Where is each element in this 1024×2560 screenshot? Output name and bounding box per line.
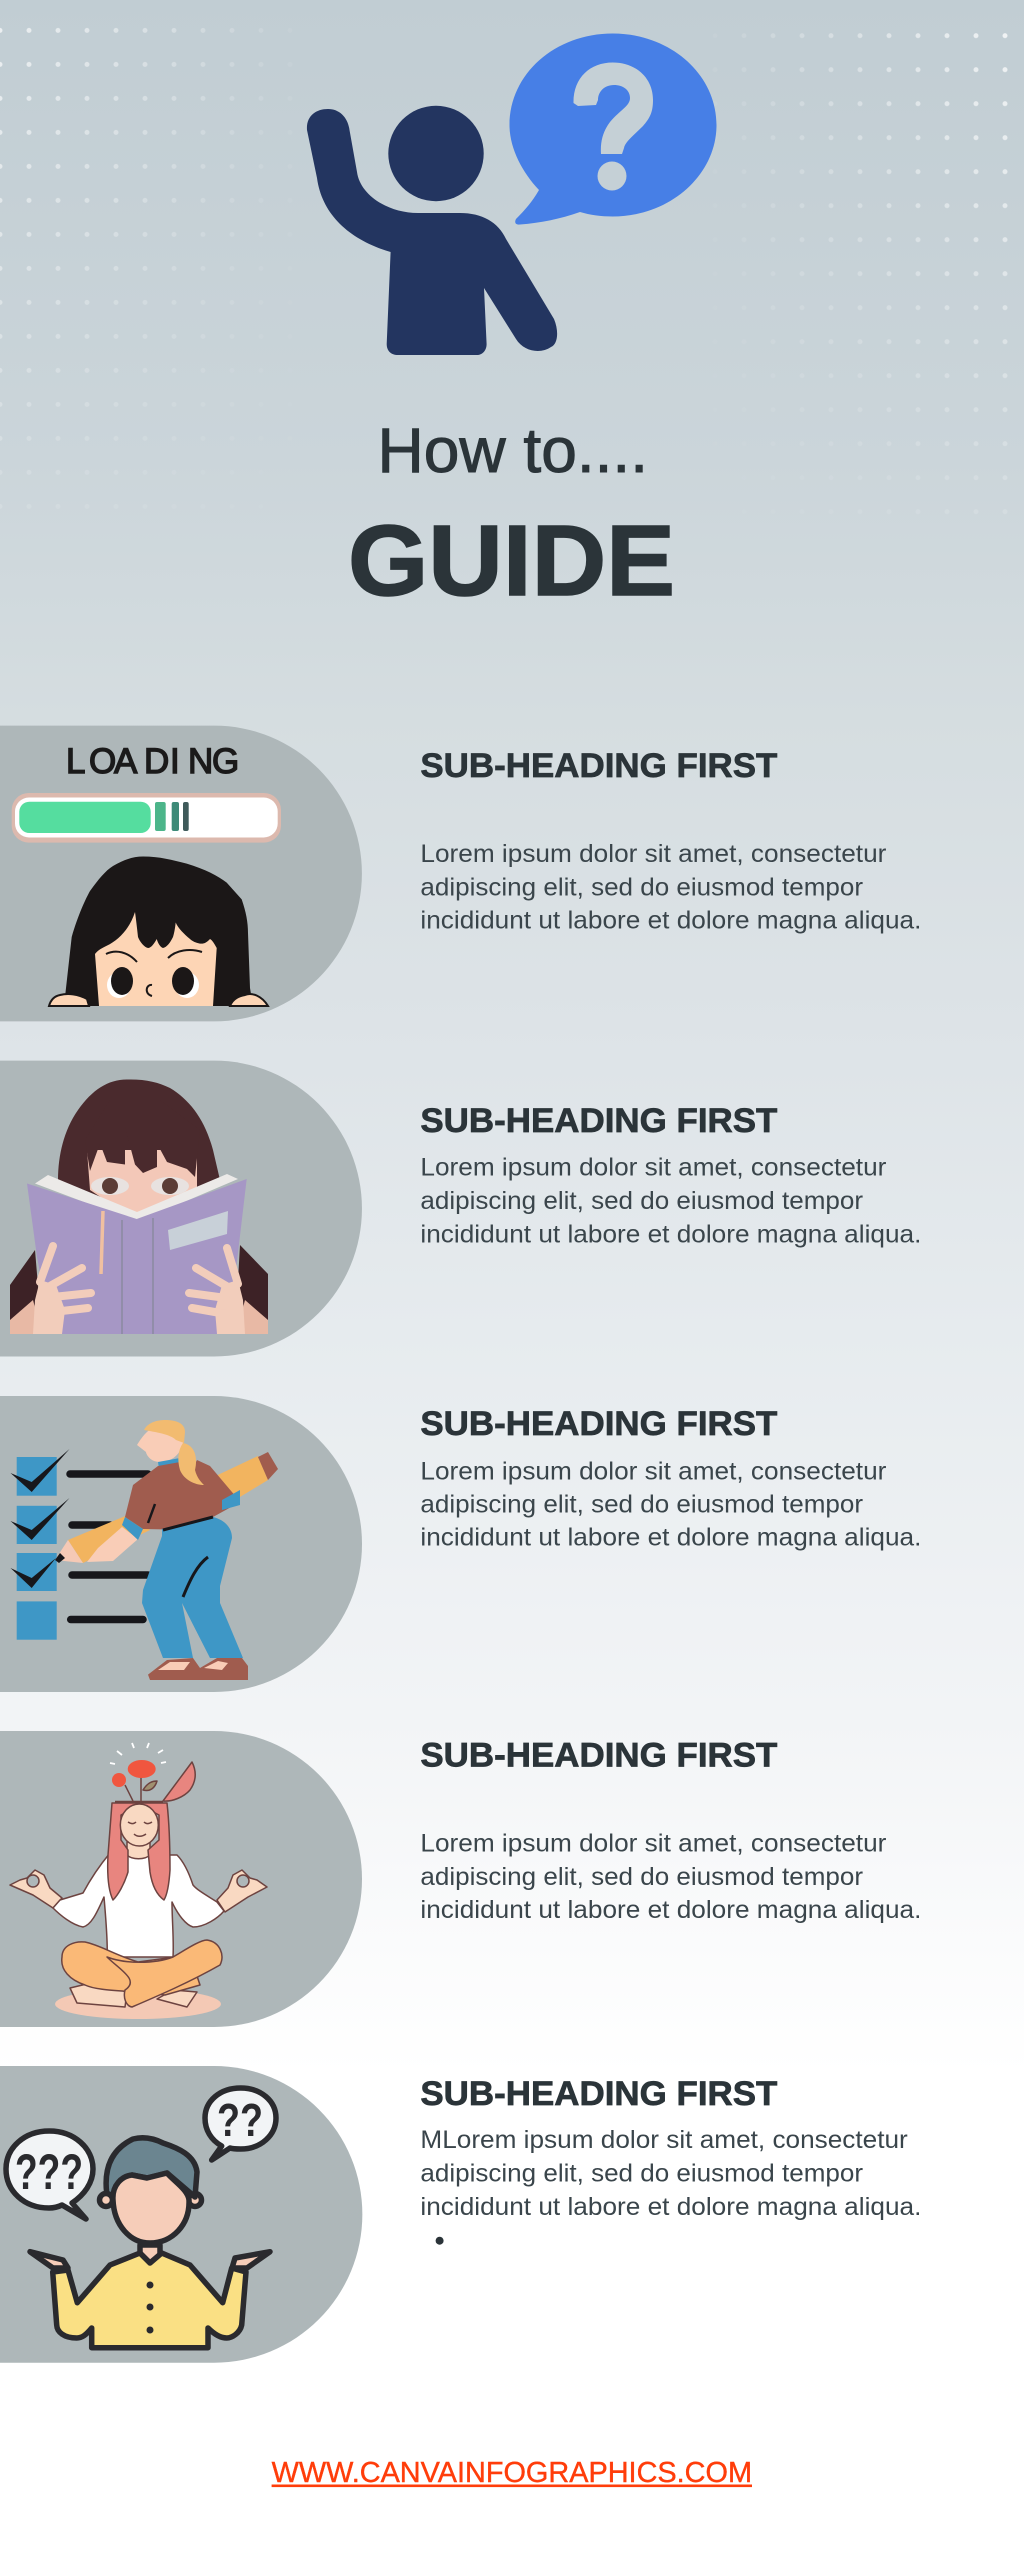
icon: waving person	[307, 106, 557, 355]
hands holding book	[10, 1246, 268, 1334]
panel: step 1 loading illustration	[0, 726, 362, 1021]
body text 1: Lorem ipsum dolor sit amet, consectetur	[420, 840, 886, 868]
open purple book	[27, 1174, 247, 1334]
sub-heading 3: SUB-HEADING FIRST	[420, 1405, 777, 1443]
sub-heading 2: SUB-HEADING FIRST	[420, 1102, 777, 1140]
icon: question speech bubble	[510, 34, 716, 225]
body text 2: adipiscing elit, sed do eiusmod tempor	[420, 1187, 863, 1215]
sub-heading 5: SUB-HEADING FIRST	[420, 2075, 777, 2113]
right question bubble	[205, 2088, 276, 2160]
left question bubble	[6, 2131, 93, 2219]
body text 3: Lorem ipsum dolor sit amet, consectetur	[420, 1457, 886, 1485]
body text 3	[420, 1457, 921, 1552]
panel: step 3 checklist illustration	[0, 1396, 362, 1692]
body text 5	[420, 2126, 921, 2245]
confused man shrugging	[30, 2138, 270, 2348]
footer website link: WWW.CANVAINFOGRAPHICS.COM	[272, 2457, 752, 2489]
right question bubble: ??	[217, 2094, 263, 2146]
loading label: LOADING	[66, 742, 239, 781]
checklist boxes and marks	[10, 1449, 148, 1640]
peeking girl	[49, 856, 268, 1006]
body text 2: incididunt ut labore et dolore magna aliqua.	[420, 1220, 921, 1248]
title: GUIDE: GUIDE	[348, 505, 675, 617]
body text 1: incididunt ut labore et dolore magna aliqua.	[420, 906, 921, 934]
body text 5: MLorem ipsum dolor sit amet, consectetur	[420, 2126, 908, 2154]
body text 4: Lorem ipsum dolor sit amet, consectetur	[420, 1830, 886, 1858]
body text 3: adipiscing elit, sed do eiusmod tempor	[420, 1491, 863, 1519]
sub-heading 4: SUB-HEADING FIRST	[420, 1736, 777, 1774]
body text 4: incididunt ut labore et dolore magna aliqua.	[420, 1896, 921, 1924]
title: How to....: How to....	[378, 416, 648, 486]
loading progress bar	[12, 793, 281, 843]
body text 2	[420, 1154, 921, 1248]
sub-heading 1: SUB-HEADING FIRST	[420, 747, 777, 785]
body text 5: adipiscing elit, sed do eiusmod tempor	[420, 2160, 863, 2188]
panel: step 5 confused man illustration	[0, 2066, 362, 2363]
icon: person raising hand with question bubble	[307, 34, 716, 355]
body text 2: Lorem ipsum dolor sit amet, consectetur	[420, 1154, 886, 1182]
body text 5: incididunt ut labore et dolore magna aliqua.	[420, 2193, 921, 2221]
left question bubble: ???	[15, 2144, 83, 2200]
girl behind book	[10, 1079, 268, 1334]
meditating woman with flower	[10, 1743, 267, 2019]
panel: step 2 reading girl illustration	[0, 1061, 362, 1356]
body text 3: incididunt ut labore et dolore magna aliqua.	[420, 1524, 921, 1552]
body text 4: adipiscing elit, sed do eiusmod tempor	[420, 1863, 863, 1891]
body text 1: adipiscing elit, sed do eiusmod tempor	[420, 873, 863, 901]
panel: step 4 meditation illustration	[0, 1731, 362, 2027]
woman carrying giant pencil	[55, 1420, 278, 1680]
body text 4	[420, 1830, 921, 1924]
body text 1	[420, 840, 921, 934]
